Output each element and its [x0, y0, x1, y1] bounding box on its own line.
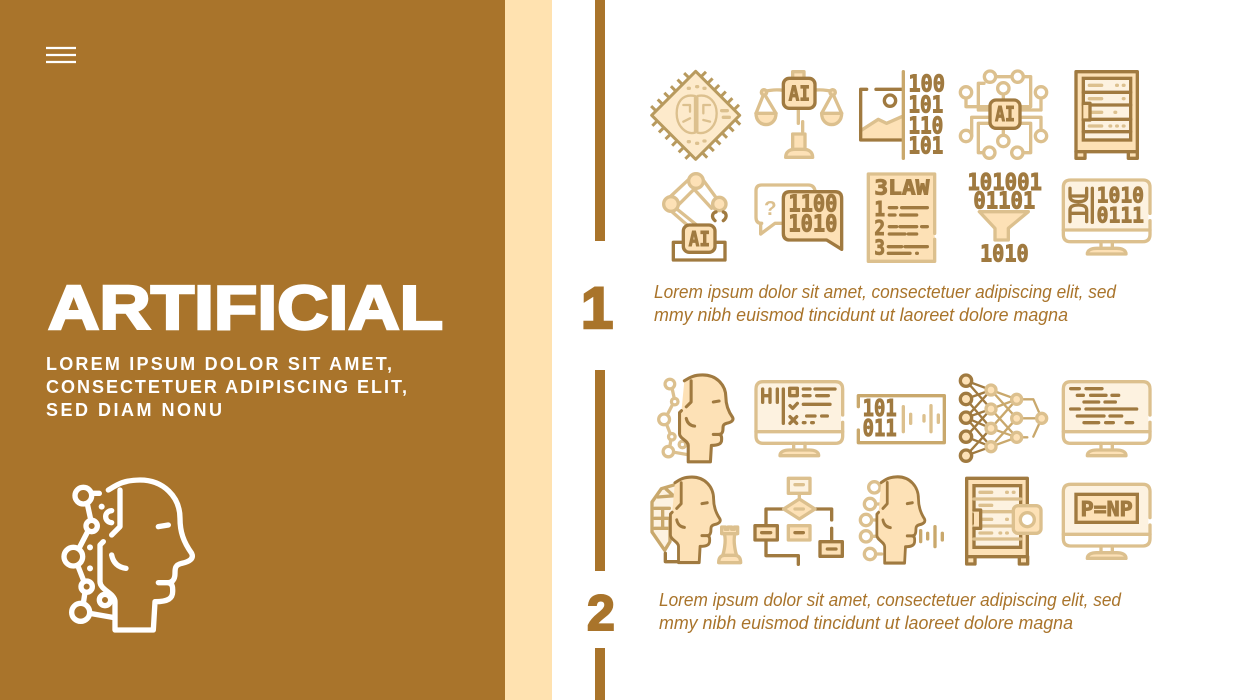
icon: three laws document: 3LAW	[874, 175, 930, 199]
icon: head with nodes	[659, 375, 733, 462]
icon: code monitor	[1063, 382, 1150, 456]
subtitle	[46, 354, 407, 420]
subtitle: SED DIAM NONU	[46, 400, 222, 420]
icon: three laws document: 3	[874, 235, 885, 259]
icon: binary funnel: 101001	[967, 170, 1042, 196]
icon: voice head with nodes	[860, 477, 942, 563]
icon: AI network: AI	[995, 102, 1015, 126]
icon: neural network	[960, 375, 1047, 461]
icon: hamburger menu	[46, 48, 76, 62]
icon: head with chess rook	[652, 477, 741, 563]
left brown panel	[0, 0, 505, 700]
icon: three laws document: 1	[874, 197, 885, 221]
icon: AI scale: AI	[789, 82, 810, 106]
icon: P=NP monitor: P=NP	[1081, 497, 1133, 521]
icon: HI checklist monitor	[756, 382, 843, 456]
icon: DNA data monitor: 0111	[1097, 203, 1144, 228]
text block 1: Lorem ipsum dolor sit amet, consectetuer adipiscing elit, sed	[654, 282, 1117, 302]
title: ARTIFICIAL	[48, 274, 443, 343]
number 2: 2	[587, 585, 615, 641]
subtitle: CONSECTETUER ADIPISCING ELIT,	[46, 377, 407, 397]
icon: large head with nodes	[64, 480, 192, 630]
icon: flowchart	[755, 478, 842, 564]
icon: robot arm	[664, 174, 726, 260]
vertical bar middle	[595, 370, 605, 571]
text block 1	[654, 282, 1117, 325]
icon group: rows 2 right	[960, 375, 1150, 564]
icon: binary funnel	[967, 170, 1042, 267]
icon: AI network	[960, 71, 1047, 158]
icon: server rack	[1076, 72, 1137, 158]
light cream strip	[505, 0, 552, 700]
text block 2: Lorem ipsum dolor sit amet, consectetuer adipiscing elit, sed	[659, 590, 1122, 610]
icon: image to binary: 100	[908, 72, 945, 98]
icon: image to binary: 110	[908, 113, 943, 139]
number 1: 1	[581, 276, 613, 341]
icon group: rows 2 left	[652, 375, 944, 564]
icon: question and binary chat: 1100	[788, 192, 837, 218]
text block 1: mmy nibh euismod tincidunt ut laoreet dolore magna	[654, 305, 1068, 325]
icon: question and binary chat: ?	[764, 197, 777, 220]
icon: image to binary: 101	[908, 92, 943, 118]
icon group: rows 1 right	[960, 71, 1150, 267]
icon: question and binary chat: 1010	[788, 212, 837, 238]
icon: binary waveform	[858, 396, 944, 443]
icon: image to binary	[861, 72, 945, 159]
icon: binary waveform: 101	[863, 396, 897, 422]
icon group: rows 1 left	[652, 71, 945, 261]
icon: image to binary: 101	[908, 133, 943, 159]
icon: binary funnel: 1010	[980, 241, 1029, 267]
icon: three laws document: 2	[874, 216, 885, 240]
icon: server with camera	[967, 478, 1041, 564]
icon: binary waveform: 011	[863, 416, 897, 442]
vertical bar bottom	[595, 648, 605, 700]
icon: three laws document	[868, 174, 935, 261]
icon: brain chip	[652, 71, 740, 159]
icon: binary funnel: 01101	[973, 188, 1035, 214]
icon: AI scale	[756, 72, 842, 157]
icon: question and binary chat	[756, 185, 842, 249]
icon: robot arm: AI	[689, 227, 710, 251]
icon: DNA data monitor: 1010	[1097, 184, 1144, 209]
icon: P=NP monitor	[1063, 484, 1150, 558]
subtitle: LOREM IPSUM DOLOR SIT AMET,	[46, 354, 392, 374]
icon: DNA data monitor	[1063, 180, 1150, 254]
vertical bar top	[595, 0, 605, 241]
text block 2: mmy nibh euismod tincidunt ut laoreet dolore magna	[659, 613, 1073, 633]
text block 2	[659, 590, 1122, 633]
